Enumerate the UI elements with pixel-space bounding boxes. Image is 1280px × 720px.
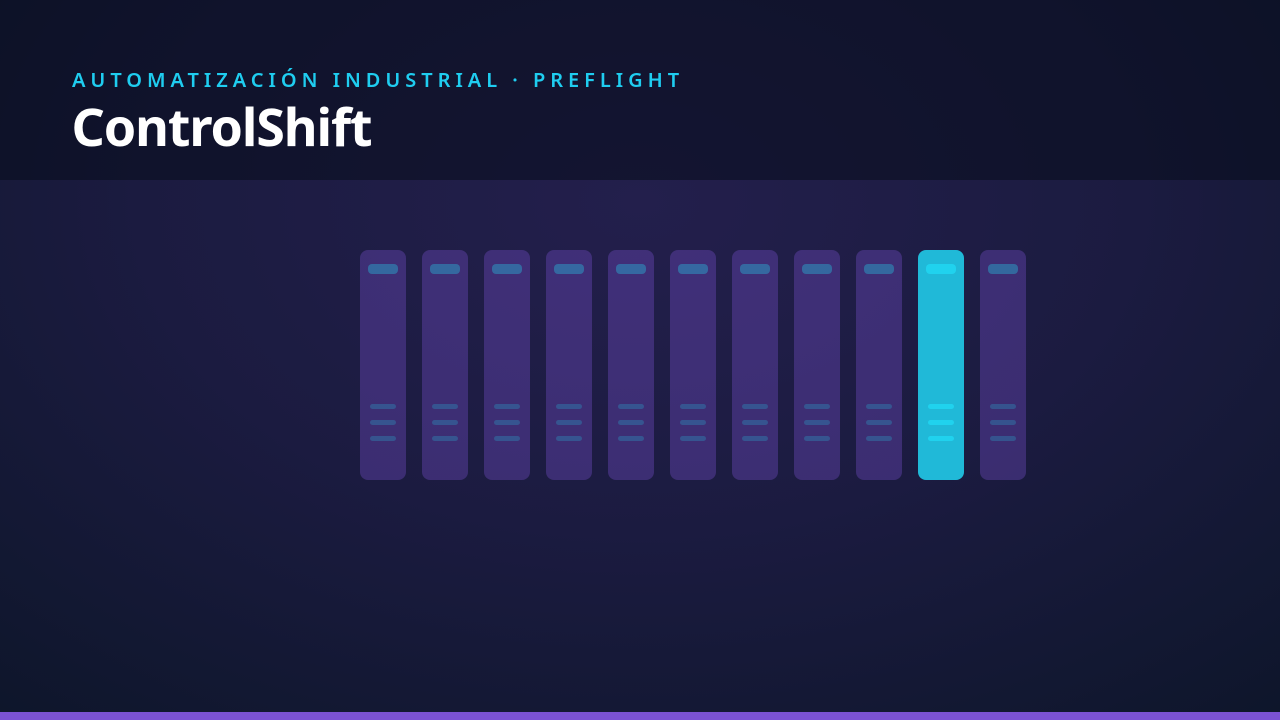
column 9 <box>856 250 902 480</box>
column 3 <box>484 250 530 480</box>
column 10 highlighted <box>918 250 964 480</box>
column 4 <box>546 250 592 480</box>
eyebrow label: AUTOMATIZACIÓN INDUSTRIAL · PREFLIGHT <box>72 66 684 93</box>
header band <box>0 0 1280 180</box>
column 8 <box>794 250 840 480</box>
column 5 <box>608 250 654 480</box>
title: ControlShift <box>72 91 371 162</box>
column 7 <box>732 250 778 480</box>
column 1 <box>360 250 406 480</box>
column 2 <box>422 250 468 480</box>
column 11 <box>980 250 1026 480</box>
bottom accent bar <box>0 712 1280 720</box>
column 6 <box>670 250 716 480</box>
